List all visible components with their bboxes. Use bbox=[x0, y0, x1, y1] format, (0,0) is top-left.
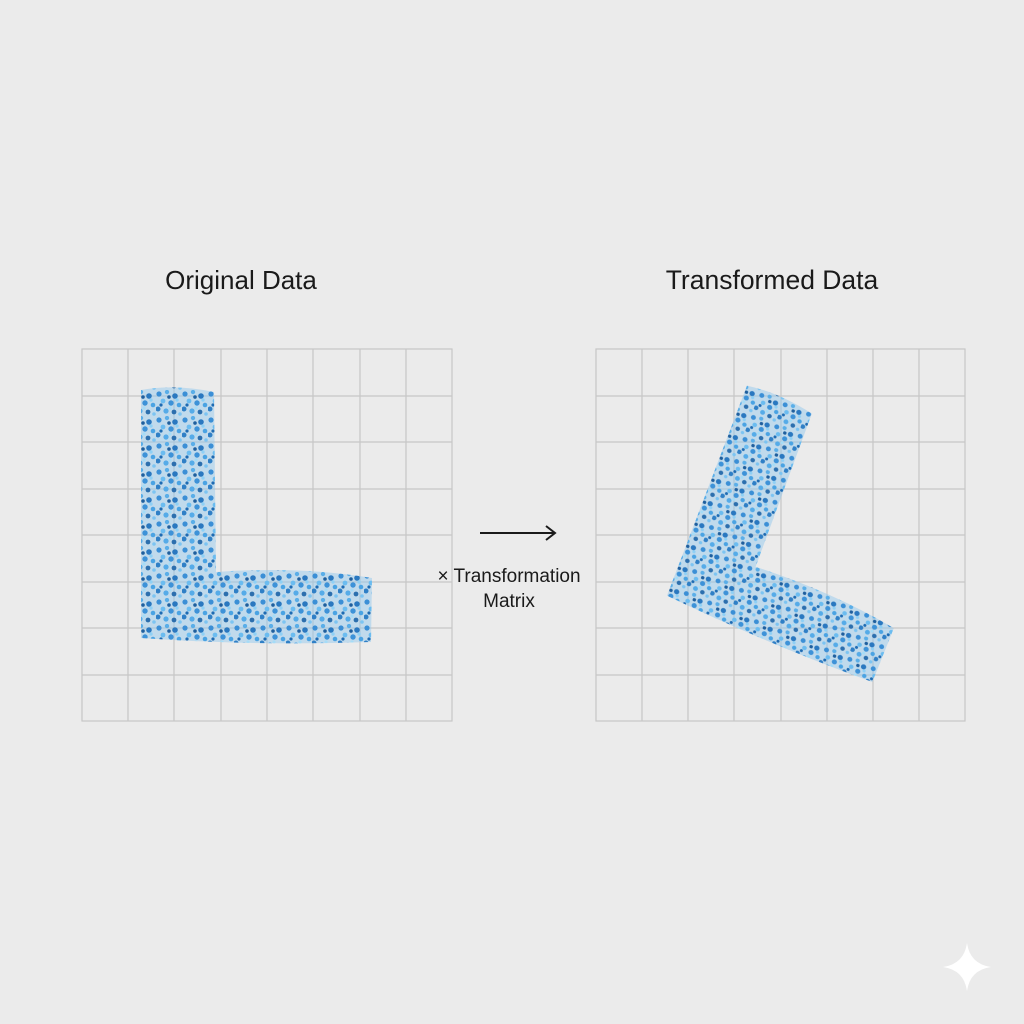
grid: original bbox=[82, 349, 452, 721]
icon: sparkle bbox=[943, 943, 991, 991]
title: transformed data: Transformed Data bbox=[666, 265, 879, 295]
arrow bbox=[480, 526, 555, 540]
scatter: original L shape bbox=[141, 387, 372, 644]
label: transformation matrix: × Transformation bbox=[437, 566, 581, 587]
scatter: transformed L shape bbox=[667, 386, 894, 682]
grid: transformed bbox=[596, 349, 965, 721]
label: transformation matrix bbox=[437, 566, 581, 612]
label: transformation matrix: Matrix bbox=[483, 591, 535, 612]
title: original data: Original Data bbox=[165, 265, 317, 295]
